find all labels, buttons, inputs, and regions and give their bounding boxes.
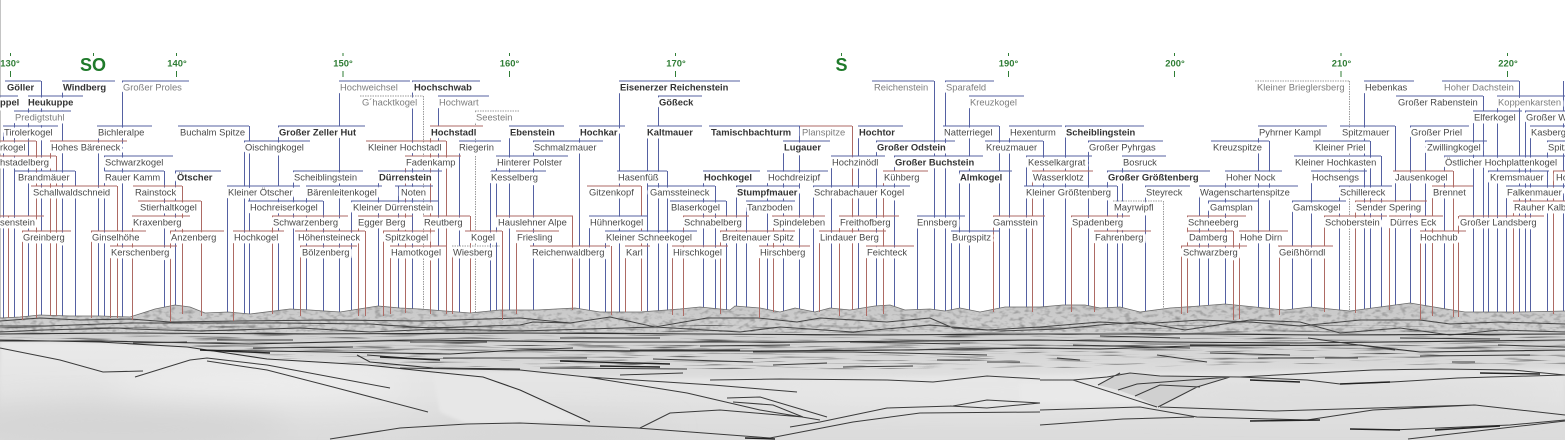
label: Hochkar: Hochkar [580, 126, 618, 138]
label: Burgspitz: Burgspitz [952, 232, 991, 242]
label: Kleiner Dürrenstein: Kleiner Dürrenstein [353, 202, 433, 212]
label: Kleiner Priel: Kleiner Priel [1315, 142, 1366, 152]
label: Buchalm Spitze: Buchalm Spitze [180, 126, 245, 138]
label: Schnabelberg: Schnabelberg [684, 216, 742, 228]
label: Hochtor: Hochtor [859, 126, 895, 138]
foreground shading [0, 369, 1550, 440]
label: Freithofberg: Freithofberg [840, 216, 891, 228]
mid-distance long lines [0, 333, 1565, 422]
label: Seestein: Seestein [476, 112, 512, 122]
label: Anzenberg: Anzenberg [171, 232, 216, 242]
label: Hirschkogel: Hirschkogel [673, 246, 722, 258]
label: Natterriegel: Natterriegel [944, 126, 992, 138]
label: Kogel: Kogel [471, 232, 495, 242]
rock texture along skyline [0, 304, 1565, 332]
label: Hirschberg: Hirschberg [760, 246, 805, 258]
label: Zwillingkogel: Zwillingkogel [1427, 142, 1481, 152]
peak labels [0, 81, 1565, 258]
label: Schwarzkogel: Schwarzkogel [105, 156, 163, 168]
label: Blaserkogel: Blaserkogel [671, 202, 720, 212]
label: Geißhörndl: Geißhörndl [1279, 246, 1325, 258]
label: Gitzenkopf: Gitzenkopf [589, 186, 634, 198]
label: Rauer Kamm: Rauer Kamm [105, 172, 160, 182]
label: Planspitze: Planspitze [802, 126, 845, 138]
label: Greinberg: Greinberg [23, 232, 65, 242]
label: Kreuzmauer: Kreuzmauer [986, 142, 1037, 152]
label: Sparafeld: Sparafeld [946, 82, 986, 92]
terrain [0, 300, 1565, 440]
label: Jausenkogel: Jausenkogel [1395, 172, 1448, 182]
label: Spadenberg: Spadenberg [1072, 216, 1123, 228]
bearing 200: 200° [1165, 58, 1185, 68]
label: Hochstadl bold: Hochstadl [431, 126, 476, 138]
label: Wagenschartenspitze: Wagenschartenspitze [1200, 186, 1290, 198]
bearing 210: 210° [1332, 58, 1351, 68]
label: Koppenkarsten: Koppenkarsten [1498, 96, 1561, 108]
label: Feichteck: Feichteck [867, 246, 907, 258]
label: Kesselberg: Kesselberg [491, 172, 538, 182]
label: Kühberg: Kühberg [884, 172, 919, 182]
darker hill facets [1098, 373, 1230, 407]
upper ridge lines [0, 317, 1565, 335]
label: Großer Größtenberg: Großer Größtenberg [1108, 172, 1199, 182]
label: Lindauer Berg: Lindauer Berg [820, 232, 879, 242]
label: Hochdreizipf: Hochdreizipf [768, 172, 821, 182]
bearing 150: 150° [333, 58, 353, 68]
streak band upper [0, 325, 1565, 351]
tick marks [10, 53, 1508, 77]
blue leader lines [4, 81, 1564, 325]
label: Hochsengs: Hochsengs [1312, 172, 1359, 182]
label: Gamsstein: Gamsstein [993, 216, 1038, 228]
label: Ginselhöhe: Ginselhöhe [92, 232, 139, 242]
direction S: S [835, 55, 848, 75]
label: Großer Priel: Großer Priel [1411, 126, 1462, 138]
label: Hochschwab: Hochschwab [414, 82, 472, 92]
label: Schwarzenberg: Schwarzenberg [273, 216, 338, 228]
label: Göller: Göller [7, 82, 34, 92]
label: Noten: Noten [401, 186, 426, 198]
left edge line [0, 0, 2, 440]
label: Spitzkogel: Spitzkogel [385, 232, 428, 242]
streak band lower [192, 345, 1565, 370]
label: Kleiner Hochkasten: Kleiner Hochkasten [1295, 156, 1376, 168]
label: Hinterer Polster: Hinterer Polster [497, 156, 562, 168]
foreground slopes [0, 341, 1565, 440]
label: Heukuppe: Heukuppe [28, 96, 73, 108]
label: Fadenkamp: Fadenkamp [406, 156, 456, 168]
label: Rainstock: Rainstock [135, 186, 176, 198]
bearing 190: 190° [999, 58, 1018, 68]
label: Dürres Eck: Dürres Eck [1390, 216, 1437, 228]
label: Hohes Bäreneck: Hohes Bäreneck [51, 142, 121, 152]
label: Reutberg: Reutberg [424, 216, 463, 228]
dotted grey leader lines [424, 81, 1350, 325]
label: Großer Buchstein: Großer Buchstein [895, 156, 974, 168]
label: Kreuzkogel: Kreuzkogel [970, 96, 1017, 108]
label: Schwarzberg: Schwarzberg [1183, 246, 1238, 258]
label: Bölzenberg: Bölzenberg [302, 246, 349, 258]
label: Eisenerzer Reichenstein: Eisenerzer Reichenstein [620, 82, 729, 92]
label: Ötscher: Ötscher [177, 172, 213, 182]
label: Hochzinödl: Hochzinödl [832, 156, 878, 168]
label: Windberg: Windberg [63, 82, 106, 92]
label: Pyhrner Kampl: Pyhrner Kampl [1259, 126, 1321, 138]
label: Hochweichsel: Hochweichsel [340, 82, 398, 92]
label: Kaltmauer: Kaltmauer [647, 126, 693, 138]
label: Bichleralpe: Bichleralpe [98, 126, 144, 138]
label: Schrabachauer Kogel: Schrabachauer Kogel [814, 186, 904, 198]
label: Noten [395, 186, 433, 198]
label: Breitenauer Spitz: Breitenauer Spitz [722, 232, 794, 242]
label: Bosruck: Bosruck [1123, 156, 1157, 168]
label: Gößeck: Gößeck [659, 96, 694, 108]
label: Hoher Nock: Hoher Nock [1226, 172, 1276, 182]
label: Kremsmauer: Kremsmauer [1490, 172, 1544, 182]
label: Karl: Karl [626, 246, 643, 258]
label: Kleiner Hochstadl: Kleiner Hochstadl [368, 142, 441, 152]
label: Stierhaltkogel: Stierhaltkogel [140, 202, 197, 212]
label: Reichenstein: Reichenstein [874, 82, 928, 92]
label: Großer Rabenstein: Großer Rabenstein [1398, 96, 1478, 108]
label: Riegerin: Riegerin [459, 142, 494, 152]
mid-distance short dashes [133, 336, 1565, 375]
terrain lines [0, 303, 1565, 439]
label: Dürrenstein: Dürrenstein [379, 172, 432, 182]
terrain body [0, 303, 1565, 440]
label: Stumpfmauer: Stumpfmauer [737, 186, 798, 198]
label: rkogel: rkogel [0, 142, 26, 152]
label: Tamischbachturm: Tamischbachturm [711, 126, 791, 138]
label: Schillereck: Schillereck [1340, 186, 1386, 198]
red leader lines [8, 126, 1554, 322]
label: Spindeleben: Spindeleben [773, 216, 825, 228]
label: Scheiblingstein bold: Scheiblingstein [1066, 126, 1136, 138]
label: Kraxenberg: Kraxenberg [133, 216, 181, 228]
label: Fahrenberg: Fahrenberg [1095, 232, 1143, 242]
label: Wiesberg: Wiesberg [453, 246, 493, 258]
label: Spitzmauer: Spitzmauer [1342, 126, 1389, 138]
label: Hebenkas: Hebenkas [1365, 82, 1408, 92]
label: Großer Zeller Hut: Großer Zeller Hut [279, 126, 356, 138]
label: ppel: ppel [0, 96, 19, 108]
direction SO: SO [80, 55, 106, 75]
label: Karl [625, 246, 650, 258]
foreground ridge lines [0, 348, 1565, 439]
label: Falkenmauer: Falkenmauer [1507, 186, 1562, 198]
label: Damberg: Damberg [1189, 232, 1228, 242]
label: Almkogel: Almkogel [960, 172, 1002, 182]
skyline ridge [0, 303, 1565, 318]
label: Scheiblingstein: Scheiblingstein [294, 172, 357, 182]
label: Kasberg: Kasberg [1531, 126, 1565, 138]
foreground heavy ridge accents [200, 350, 1540, 439]
label: Hoher Dachstein: Hoher Dachstein [1444, 82, 1514, 92]
label: Gamsplan: Gamsplan [1210, 202, 1253, 212]
label: Großer Pyhrgas: Großer Pyhrgas [1089, 142, 1156, 152]
label: Kleiner Brieglersberg: Kleiner Brieglersberg [1257, 82, 1345, 92]
label: Hauslehner Alpe: Hauslehner Alpe [498, 216, 567, 228]
label: Tirolerkogel: Tirolerkogel [4, 126, 53, 138]
label: Gamssteineck: Gamssteineck [650, 186, 710, 198]
label: Hexenturm: Hexenturm [1010, 126, 1056, 138]
label: Hohe Dirn: Hohe Dirn [1240, 232, 1282, 242]
label: Sender Spering: Sender Spering [1356, 202, 1421, 212]
label: senstein: senstein [0, 216, 35, 228]
label: Großer Landsberg: Großer Landsberg [1460, 216, 1537, 228]
label: Hochkogel bold: Hochkogel [704, 172, 752, 182]
label: Hühnerkogel: Hühnerkogel [590, 216, 643, 228]
label: Steyreck: Steyreck [1146, 186, 1183, 198]
label: Kerschenberg: Kerschenberg [111, 246, 169, 258]
label: Tanzboden: Tanzboden [747, 202, 793, 212]
label: Hamotkogel: Hamotkogel [391, 246, 441, 258]
label: Schallwaldschneid: Schallwaldschneid [33, 186, 110, 198]
bearing 160: 160° [500, 58, 519, 68]
label: Großer Proles: Großer Proles [123, 82, 182, 92]
label: Kreuzspitze: Kreuzspitze [1213, 142, 1262, 152]
label: Reichenwaldberg: Reichenwaldberg [532, 246, 604, 258]
label: Hochkogel: Hochkogel [234, 232, 278, 242]
label: Kleiner Ötscher: Kleiner Ötscher [228, 186, 293, 198]
label: G'hacktkogel: G´hacktkogel [362, 96, 417, 108]
label: Höhensteineck: Höhensteineck [298, 232, 360, 242]
label: Friesling: Friesling [517, 232, 552, 242]
label: Großer Odstein: Großer Odstein [877, 142, 946, 152]
bearing 130: 130° [0, 58, 20, 68]
label: Brandmäuer: Brandmäuer [18, 172, 70, 182]
label: Egger Berg: Egger Berg [358, 216, 405, 228]
label: Bärenleitenkogel: Bärenleitenkogel [307, 186, 377, 198]
label: Wasserklotz: Wasserklotz [1033, 172, 1084, 182]
light hill wedges [433, 374, 1158, 424]
label: Kesselkargrat: Kesselkargrat [1028, 156, 1086, 168]
label: Kogel [465, 231, 502, 242]
label: Brennet: Brennet [1433, 186, 1466, 198]
label: Gamskogel: Gamskogel [1293, 202, 1340, 212]
label: Ennsberg: Ennsberg [917, 216, 957, 228]
label: Hochwart: Hochwart [439, 96, 479, 108]
bearing 220: 220° [1498, 58, 1518, 68]
compass scale [0, 53, 1518, 77]
label: Predigtstuhl: Predigtstuhl [15, 112, 65, 122]
label: Lugauer: Lugauer [784, 142, 821, 152]
label: Schneeberg: Schneeberg [1188, 216, 1239, 228]
label: Hochhub: Hochhub [1420, 232, 1458, 242]
label: Hochreiserkogel: Hochreiserkogel [250, 202, 318, 212]
label: Ebenstein: Ebenstein [510, 126, 555, 138]
label: Elferkogel: Elferkogel [1474, 112, 1516, 122]
bearing 170: 170° [666, 58, 686, 68]
label: Mayrwipfl: Mayrwipfl [1114, 202, 1154, 212]
bearing 140: 140° [167, 58, 187, 68]
label: Östlicher Hochplattenkogel: Östlicher Hochplattenkogel [1445, 156, 1557, 168]
label: Kleiner Größtenberg: Kleiner Größtenberg [1026, 186, 1111, 198]
label: hstadelberg: hstadelberg [0, 156, 49, 168]
label: Kleiner Schneekogel: Kleiner Schneekogel [606, 232, 692, 242]
label: rkogel [0, 141, 36, 152]
label: Schoberstein: Schoberstein [1325, 216, 1380, 228]
label: Schmalzmauer: Schmalzmauer [534, 142, 597, 152]
label: Oischingkogel: Oischingkogel [245, 142, 304, 152]
label: Hasenfüß: Hasenfüß [618, 172, 659, 182]
